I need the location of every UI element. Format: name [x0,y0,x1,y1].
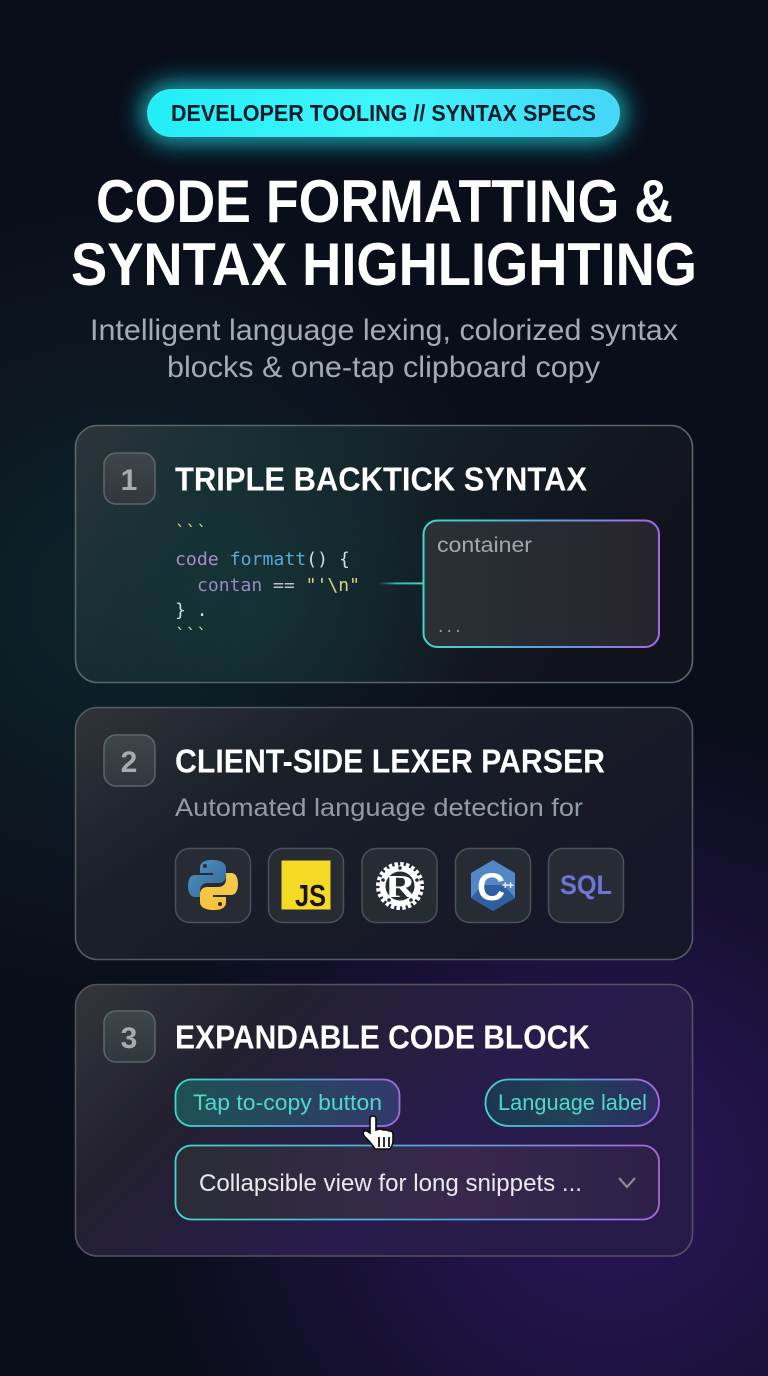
container box: ... [438,615,464,637]
code sample: } . [175,600,208,621]
heading: client-side lexer parser: CLIENT-SIDE LEXER PARSER [175,744,605,780]
code sample: contan == "'\n" [197,575,360,596]
language label [486,1080,659,1126]
icon: rust: R [385,868,417,904]
step badge 1: 1 [121,464,137,497]
icon: javascript [268,848,344,922]
title [71,168,697,298]
container box: container [437,533,532,557]
icon: c++: ++ [502,880,513,892]
icon: chevron [619,1178,635,1187]
title: CODE FORMATTING & [96,168,673,235]
language label: Language label [498,1090,647,1115]
code sample [175,522,360,646]
code sample: ``` [175,522,207,543]
panel: triple backtick syntax [76,426,692,682]
header tag pill: DEVELOPER TOOLING // SYNTAX SPECS [171,100,596,126]
heading: expandable code block: EXPANDABLE CODE BLOCK [175,1020,590,1056]
step badge 2 [104,735,155,786]
icon: rust [362,848,437,922]
subtitle: blocks & one-tap clipboard copy [167,351,600,384]
description: Automated language detection for [175,794,583,822]
icon: hand cursor [363,1116,393,1149]
subtitle [90,314,678,384]
step badge 1 [104,453,155,504]
heading: triple backtick syntax: TRIPLE BACKTICK SYNTAX [175,462,588,498]
collapsible view: Collapsible view for long snippets ... [199,1170,582,1197]
panel: client-side lexer parser [76,708,692,960]
icon: sql [548,848,624,922]
icon: sql: SQL [560,870,612,900]
subtitle: Intelligent language lexing, colorized syntax [90,314,678,347]
collapsible view [176,1146,659,1220]
step badge 3: 3 [121,1022,137,1055]
tap to copy button [176,1080,400,1126]
step badge 3 [104,1011,155,1062]
step badge 2: 2 [121,746,137,779]
icon: c++: C [477,866,505,909]
icon: javascript: JS [295,878,326,913]
connector arrow [378,582,423,584]
title: SYNTAX HIGHLIGHTING [71,231,697,298]
panel: expandable code block [76,984,692,1256]
container box [424,520,659,647]
code sample: code formatt() { [175,549,350,570]
code sample: ``` [175,625,207,646]
icon: c++ [456,848,530,922]
icon: python [176,848,250,922]
header tag pill [143,85,624,141]
tap to copy button: Tap to-copy button [193,1090,382,1115]
